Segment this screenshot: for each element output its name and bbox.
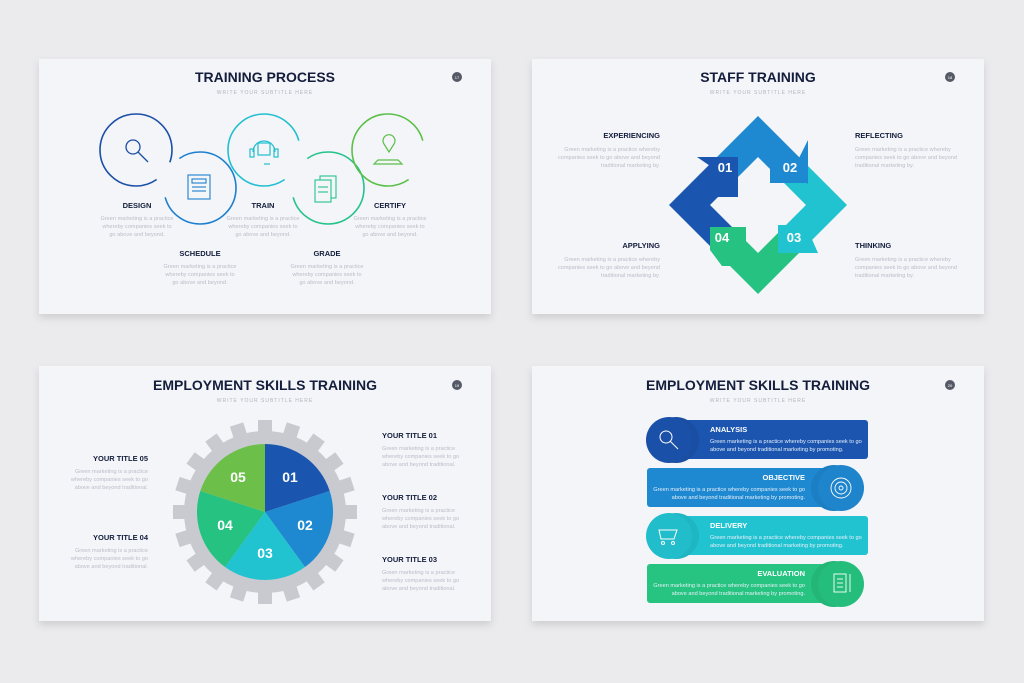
step texts: GRADE	[313, 249, 341, 258]
bar: objective: Green marketing is a practice whereby companies seek to go	[653, 487, 805, 493]
text: applying: Green marketing is a practice whereby	[564, 257, 660, 263]
step texts: CERTIFY	[374, 201, 406, 210]
step texts	[100, 201, 427, 286]
subtitle: WRITE YOUR SUBTITLE HERE	[217, 398, 313, 404]
step texts: Green marketing is a practice	[100, 216, 174, 222]
text: your title 02: YOUR TITLE 02	[382, 493, 437, 502]
bar: delivery: above and beyond traditional marketing by promoting.	[710, 543, 844, 549]
diamond arrows cycle: 02	[783, 160, 797, 175]
text: your title 03: YOUR TITLE 03	[382, 555, 437, 564]
panel: staff training	[532, 59, 984, 314]
gear pie chart: 03	[257, 545, 273, 561]
page number: 19	[455, 383, 460, 388]
gear pie chart	[173, 420, 357, 604]
panel: training process	[39, 59, 491, 314]
text: your title 05: YOUR TITLE 05	[93, 454, 148, 463]
title: EMPLOYMENT SKILLS TRAINING	[646, 377, 870, 393]
text: experiencing: companies seek to go above and beyond	[558, 155, 660, 161]
text: your title 01: YOUR TITLE 01	[382, 431, 437, 440]
text: your title 01: above and beyond traditional.	[382, 462, 456, 468]
text: your title 03: Green marketing is a practice	[382, 570, 455, 576]
step texts: TRAIN	[252, 201, 274, 210]
step texts: go above and beyond.	[235, 232, 291, 238]
step texts: whereby companies seek to	[101, 224, 172, 230]
bar: evaluation: Green marketing is a practice whereby companies seek to go	[653, 583, 805, 589]
text: applying: companies seek to go above and beyond	[558, 265, 660, 271]
icon: magnifier	[126, 140, 148, 162]
icon: headset	[250, 141, 278, 164]
bar: evaluation: above and beyond traditional marketing by promoting.	[672, 591, 805, 597]
text: reflecting: REFLECTING	[855, 131, 903, 140]
panel: employment skills gear	[39, 366, 491, 621]
text: your title 04: Green marketing is a practice	[75, 548, 148, 554]
step texts: Green marketing is a practice	[353, 216, 427, 222]
text: your title 01: whereby companies seek to go	[381, 454, 459, 460]
bar: evaluation	[647, 561, 864, 607]
text: reflecting: Green marketing is a practice whereby	[855, 147, 951, 153]
text: thinking	[855, 241, 957, 279]
bar: analysis: Green marketing is a practice whereby companies seek to go	[710, 439, 862, 445]
text: thinking: companies seek to go above and beyond	[855, 265, 957, 271]
page number: 20	[948, 383, 953, 388]
text: your title 04: YOUR TITLE 04	[93, 533, 149, 542]
text: your title 04: above and beyond traditional.	[75, 564, 148, 570]
gear pie chart: 04	[217, 517, 233, 533]
text: experiencing: traditional marketing by.	[601, 163, 660, 169]
bar: analysis	[646, 417, 868, 463]
text: your title 04	[70, 533, 149, 570]
text: your title 03	[381, 555, 459, 592]
text: your title 02: Green marketing is a practice	[382, 508, 455, 514]
text: reflecting	[855, 131, 957, 169]
bar: delivery: DELIVERY	[710, 521, 747, 530]
step texts: whereby companies seek to	[164, 272, 235, 278]
step texts: SCHEDULE	[179, 249, 221, 258]
step texts: whereby companies seek to	[354, 224, 425, 230]
title: TRAINING PROCESS	[195, 69, 335, 85]
text: your title 05: above and beyond traditional.	[75, 485, 148, 491]
subtitle: WRITE YOUR SUBTITLE HERE	[710, 398, 806, 404]
step texts: Green marketing is a practice	[290, 264, 364, 270]
text: your title 04: whereby companies seek to go	[70, 556, 148, 562]
text: experiencing	[558, 131, 660, 169]
text: your title 03: above and beyond traditional.	[382, 586, 456, 592]
step texts: Green marketing is a practice	[163, 264, 237, 270]
gear pie chart: 01	[282, 469, 298, 485]
bar: evaluation: EVALUATION	[757, 569, 805, 578]
panel: employment skills bars	[532, 366, 984, 621]
diamond arrows cycle: 01	[718, 160, 732, 175]
text: experiencing: Green marketing is a practice whereby	[564, 147, 660, 153]
text: your title 01: Green marketing is a practice	[382, 446, 455, 452]
bar: delivery	[646, 513, 868, 559]
icon: schedule	[188, 175, 210, 199]
step texts: DESIGN	[123, 201, 151, 210]
page number	[452, 72, 462, 82]
text: your title 02: above and beyond traditional.	[382, 524, 456, 530]
step texts: go above and beyond.	[362, 232, 418, 238]
text: your title 05: whereby companies seek to go	[70, 477, 148, 483]
text: your title 05	[70, 454, 148, 491]
diamond arrows cycle	[669, 116, 847, 294]
text: reflecting: traditional marketing by.	[855, 163, 914, 169]
bar: analysis: above and beyond traditional marketing by promoting.	[710, 447, 844, 453]
gear pie chart: 05	[230, 469, 246, 485]
process circles	[100, 114, 424, 224]
diamond arrows cycle: 03	[787, 230, 801, 245]
text: thinking: Green marketing is a practice whereby	[855, 257, 951, 263]
text: your title 01	[381, 431, 459, 468]
text: your title 05: Green marketing is a practice	[75, 469, 148, 475]
page number	[945, 380, 955, 390]
bar: objective: OBJECTIVE	[762, 473, 805, 482]
gear pie chart: 02	[297, 517, 313, 533]
text: reflecting: companies seek to go above and beyond	[855, 155, 957, 161]
text: your title 02: whereby companies seek to go	[381, 516, 459, 522]
subtitle: WRITE YOUR SUBTITLE HERE	[710, 90, 806, 96]
icon: map pin	[374, 135, 402, 164]
bar: analysis: ANALYSIS	[710, 425, 747, 434]
step texts: go above and beyond.	[299, 280, 355, 286]
icon: documents	[315, 176, 336, 202]
text: experiencing: EXPERIENCING	[603, 131, 660, 140]
subtitle: WRITE YOUR SUBTITLE HERE	[217, 90, 313, 96]
title: STAFF TRAINING	[700, 69, 816, 85]
step texts: whereby companies seek to	[291, 272, 362, 278]
text: your title 03: whereby companies seek to go	[381, 578, 459, 584]
title: EMPLOYMENT SKILLS TRAINING	[153, 377, 377, 393]
step texts: go above and beyond.	[172, 280, 228, 286]
page number	[945, 72, 955, 82]
page number: 17	[455, 75, 460, 80]
text: applying: APPLYING	[622, 241, 660, 250]
step texts: Green marketing is a practice	[226, 216, 300, 222]
bar: delivery: Green marketing is a practice whereby companies seek to go	[710, 535, 862, 541]
text: applying	[558, 241, 660, 279]
text: your title 02	[381, 493, 459, 530]
page number: 18	[948, 75, 953, 80]
page number	[452, 380, 462, 390]
step texts: go above and beyond.	[109, 232, 165, 238]
text: thinking: THINKING	[855, 241, 891, 250]
text: thinking: traditional marketing by.	[855, 273, 914, 279]
bar: objective: above and beyond traditional marketing by promoting.	[672, 495, 805, 501]
step texts: whereby companies seek to	[227, 224, 298, 230]
diamond arrows cycle: 04	[715, 230, 730, 245]
text: applying: traditional marketing by.	[601, 273, 660, 279]
bar: objective	[647, 465, 864, 511]
